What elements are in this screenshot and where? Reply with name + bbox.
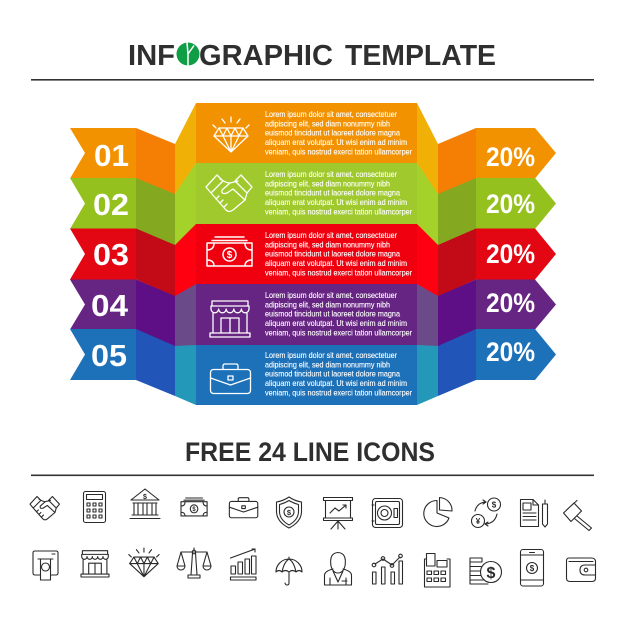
icon: handshake — [206, 175, 252, 212]
main band — [196, 103, 417, 164]
text block: adipiscing elit, sed diam nonummy nibh — [265, 360, 390, 369]
title: TEMPLATE — [345, 40, 496, 72]
icon: handshake — [30, 496, 59, 520]
text block: adipiscing elit, sed diam nonummy nibh — [265, 119, 390, 128]
icon: pie chart — [424, 498, 452, 526]
icon: ATM cash slot — [33, 551, 58, 580]
icon: document and pen — [520, 500, 548, 527]
icon: gavel — [564, 500, 592, 530]
title: INF — [128, 40, 175, 72]
left fold — [136, 329, 175, 396]
text block — [265, 291, 412, 337]
text block: aliquam erat volutpat. Ut wisi enim ad minim — [265, 379, 407, 388]
icon: businessperson — [324, 552, 352, 585]
right percent flag — [476, 329, 556, 380]
title: GRAPHIC — [199, 40, 333, 72]
text block: euismod tincidunt ut laoreet dolore magna — [265, 250, 400, 259]
right percent flag — [476, 228, 556, 280]
left side band — [175, 163, 196, 246]
percent 20%: 20% — [486, 239, 535, 269]
panel: row 04 purple — [70, 280, 556, 346]
left number flag 02 — [70, 178, 136, 229]
main band — [196, 224, 417, 284]
icon: briefcase — [229, 498, 258, 518]
right side band — [417, 345, 438, 405]
main band — [196, 345, 417, 405]
icon: shield — [276, 497, 302, 528]
icon grid — [30, 489, 596, 587]
heading: free 24 line icons: FREE 24 LINE ICONS — [185, 437, 435, 467]
text block: aliquam erat volutpat. Ut wisi enim ad minim — [265, 138, 407, 147]
left number flag 05 — [70, 329, 136, 380]
icon: balance scale — [177, 548, 211, 578]
text block: euismod tincidunt ut laoreet dolore magna — [265, 370, 400, 379]
left side band — [175, 103, 196, 194]
left fold — [136, 128, 175, 194]
text block: aliquam erat volutpat. Ut wisi enim ad minim — [265, 259, 407, 268]
icon: currency exchange: $ — [492, 500, 497, 510]
icon: bank: $ — [143, 494, 147, 501]
left side band — [175, 224, 196, 296]
percent 20%: 20% — [486, 337, 535, 367]
text block: veniam, quis nostrud exerci tation ullamcorper — [265, 207, 412, 216]
icon: green pie letter O — [176, 42, 200, 66]
right side band — [417, 224, 438, 296]
icon: umbrella — [276, 557, 302, 585]
right fold — [438, 280, 476, 346]
icon: banknotes — [207, 237, 252, 266]
text block — [265, 170, 412, 216]
text block: adipiscing elit, sed diam nonummy nibh — [265, 300, 390, 309]
text block: Lorem ipsum dolor sit amet, consectetuer — [265, 170, 397, 179]
right side band — [417, 163, 438, 246]
right percent flag — [476, 178, 556, 229]
percent 20%: 20% — [486, 288, 535, 318]
text block: veniam, quis nostrud exerci tation ullamcorper — [265, 147, 412, 156]
icon: storefront — [210, 301, 250, 337]
text block: adipiscing elit, sed diam nonummy nibh — [265, 240, 390, 249]
panel: row 05 blue — [70, 329, 556, 405]
percent 20%: 20% — [486, 142, 535, 172]
text block: Lorem ipsum dolor sit amet, consectetuer — [265, 231, 397, 240]
text block — [265, 351, 412, 397]
left fold — [136, 228, 175, 296]
left number flag 03 — [70, 228, 136, 280]
main band — [196, 284, 417, 346]
right fold — [438, 128, 476, 194]
icon: diamond — [129, 548, 159, 577]
right percent flag — [476, 280, 556, 330]
title — [128, 40, 496, 72]
text block: euismod tincidunt ut laoreet dolore magna — [265, 310, 400, 319]
text block: veniam, quis nostrud exerci tation ullamcorper — [265, 328, 412, 337]
text block: Lorem ipsum dolor sit amet, consectetuer — [265, 291, 397, 300]
text block: euismod tincidunt ut laoreet dolore magna — [265, 189, 400, 198]
icon: wallet — [566, 558, 596, 582]
left fold — [136, 178, 175, 246]
panel: row 02 green — [70, 163, 556, 246]
icon: currency exchange: ¥ — [476, 517, 481, 526]
icon: presentation board — [324, 498, 352, 529]
icon: banknotes — [181, 498, 207, 516]
left fold — [136, 280, 175, 346]
text block: aliquam erat volutpat. Ut wisi enim ad minim — [265, 319, 407, 328]
number 05: 05 — [91, 338, 127, 373]
left side band — [175, 345, 196, 405]
icon: fax machine — [424, 554, 450, 587]
panel: row 03 red — [70, 224, 556, 296]
percent 20%: 20% — [486, 189, 535, 219]
number 04: 04 — [91, 288, 129, 323]
icon: growth chart — [230, 549, 256, 580]
icon: smartphone — [520, 550, 544, 586]
text block — [265, 110, 412, 156]
left side band — [175, 284, 196, 346]
number 03: 03 — [93, 237, 129, 272]
panel: row 01 orange — [70, 103, 556, 194]
right fold — [438, 228, 476, 296]
icon: coins — [470, 558, 502, 584]
text block — [265, 231, 412, 277]
icon: shield: $ — [287, 508, 292, 517]
icon: safe — [372, 498, 402, 528]
right fold — [438, 178, 476, 246]
number 01: 01 — [94, 138, 129, 173]
icon: bank — [130, 489, 160, 518]
icon: storefront — [81, 551, 109, 577]
icon: bar and line chart — [372, 554, 402, 584]
left number flag 01 — [70, 128, 136, 178]
right side band — [417, 103, 438, 194]
icon: coins: $ — [487, 565, 496, 582]
main band — [196, 163, 417, 224]
icon: smartphone: $ — [530, 564, 535, 573]
text block: adipiscing elit, sed diam nonummy nibh — [265, 179, 390, 188]
icon: calculator — [84, 492, 106, 522]
right fold — [438, 329, 476, 396]
right percent flag — [476, 128, 556, 178]
icon: briefcase — [210, 364, 250, 394]
text block: veniam, quis nostrud exerci tation ullamcorper — [265, 388, 412, 397]
right side band — [417, 284, 438, 346]
number 02: 02 — [93, 187, 129, 222]
icon: currency exchange — [472, 498, 500, 528]
left number flag 04 — [70, 280, 136, 330]
icon: diamond — [213, 117, 249, 152]
text block: aliquam erat volutpat. Ut wisi enim ad minim — [265, 198, 407, 207]
text block: Lorem ipsum dolor sit amet, consectetuer — [265, 110, 397, 119]
text block: veniam, quis nostrud exerci tation ullamcorper — [265, 268, 412, 277]
text block: euismod tincidunt ut laoreet dolore magna — [265, 129, 400, 138]
text block: Lorem ipsum dolor sit amet, consectetuer — [265, 351, 397, 360]
